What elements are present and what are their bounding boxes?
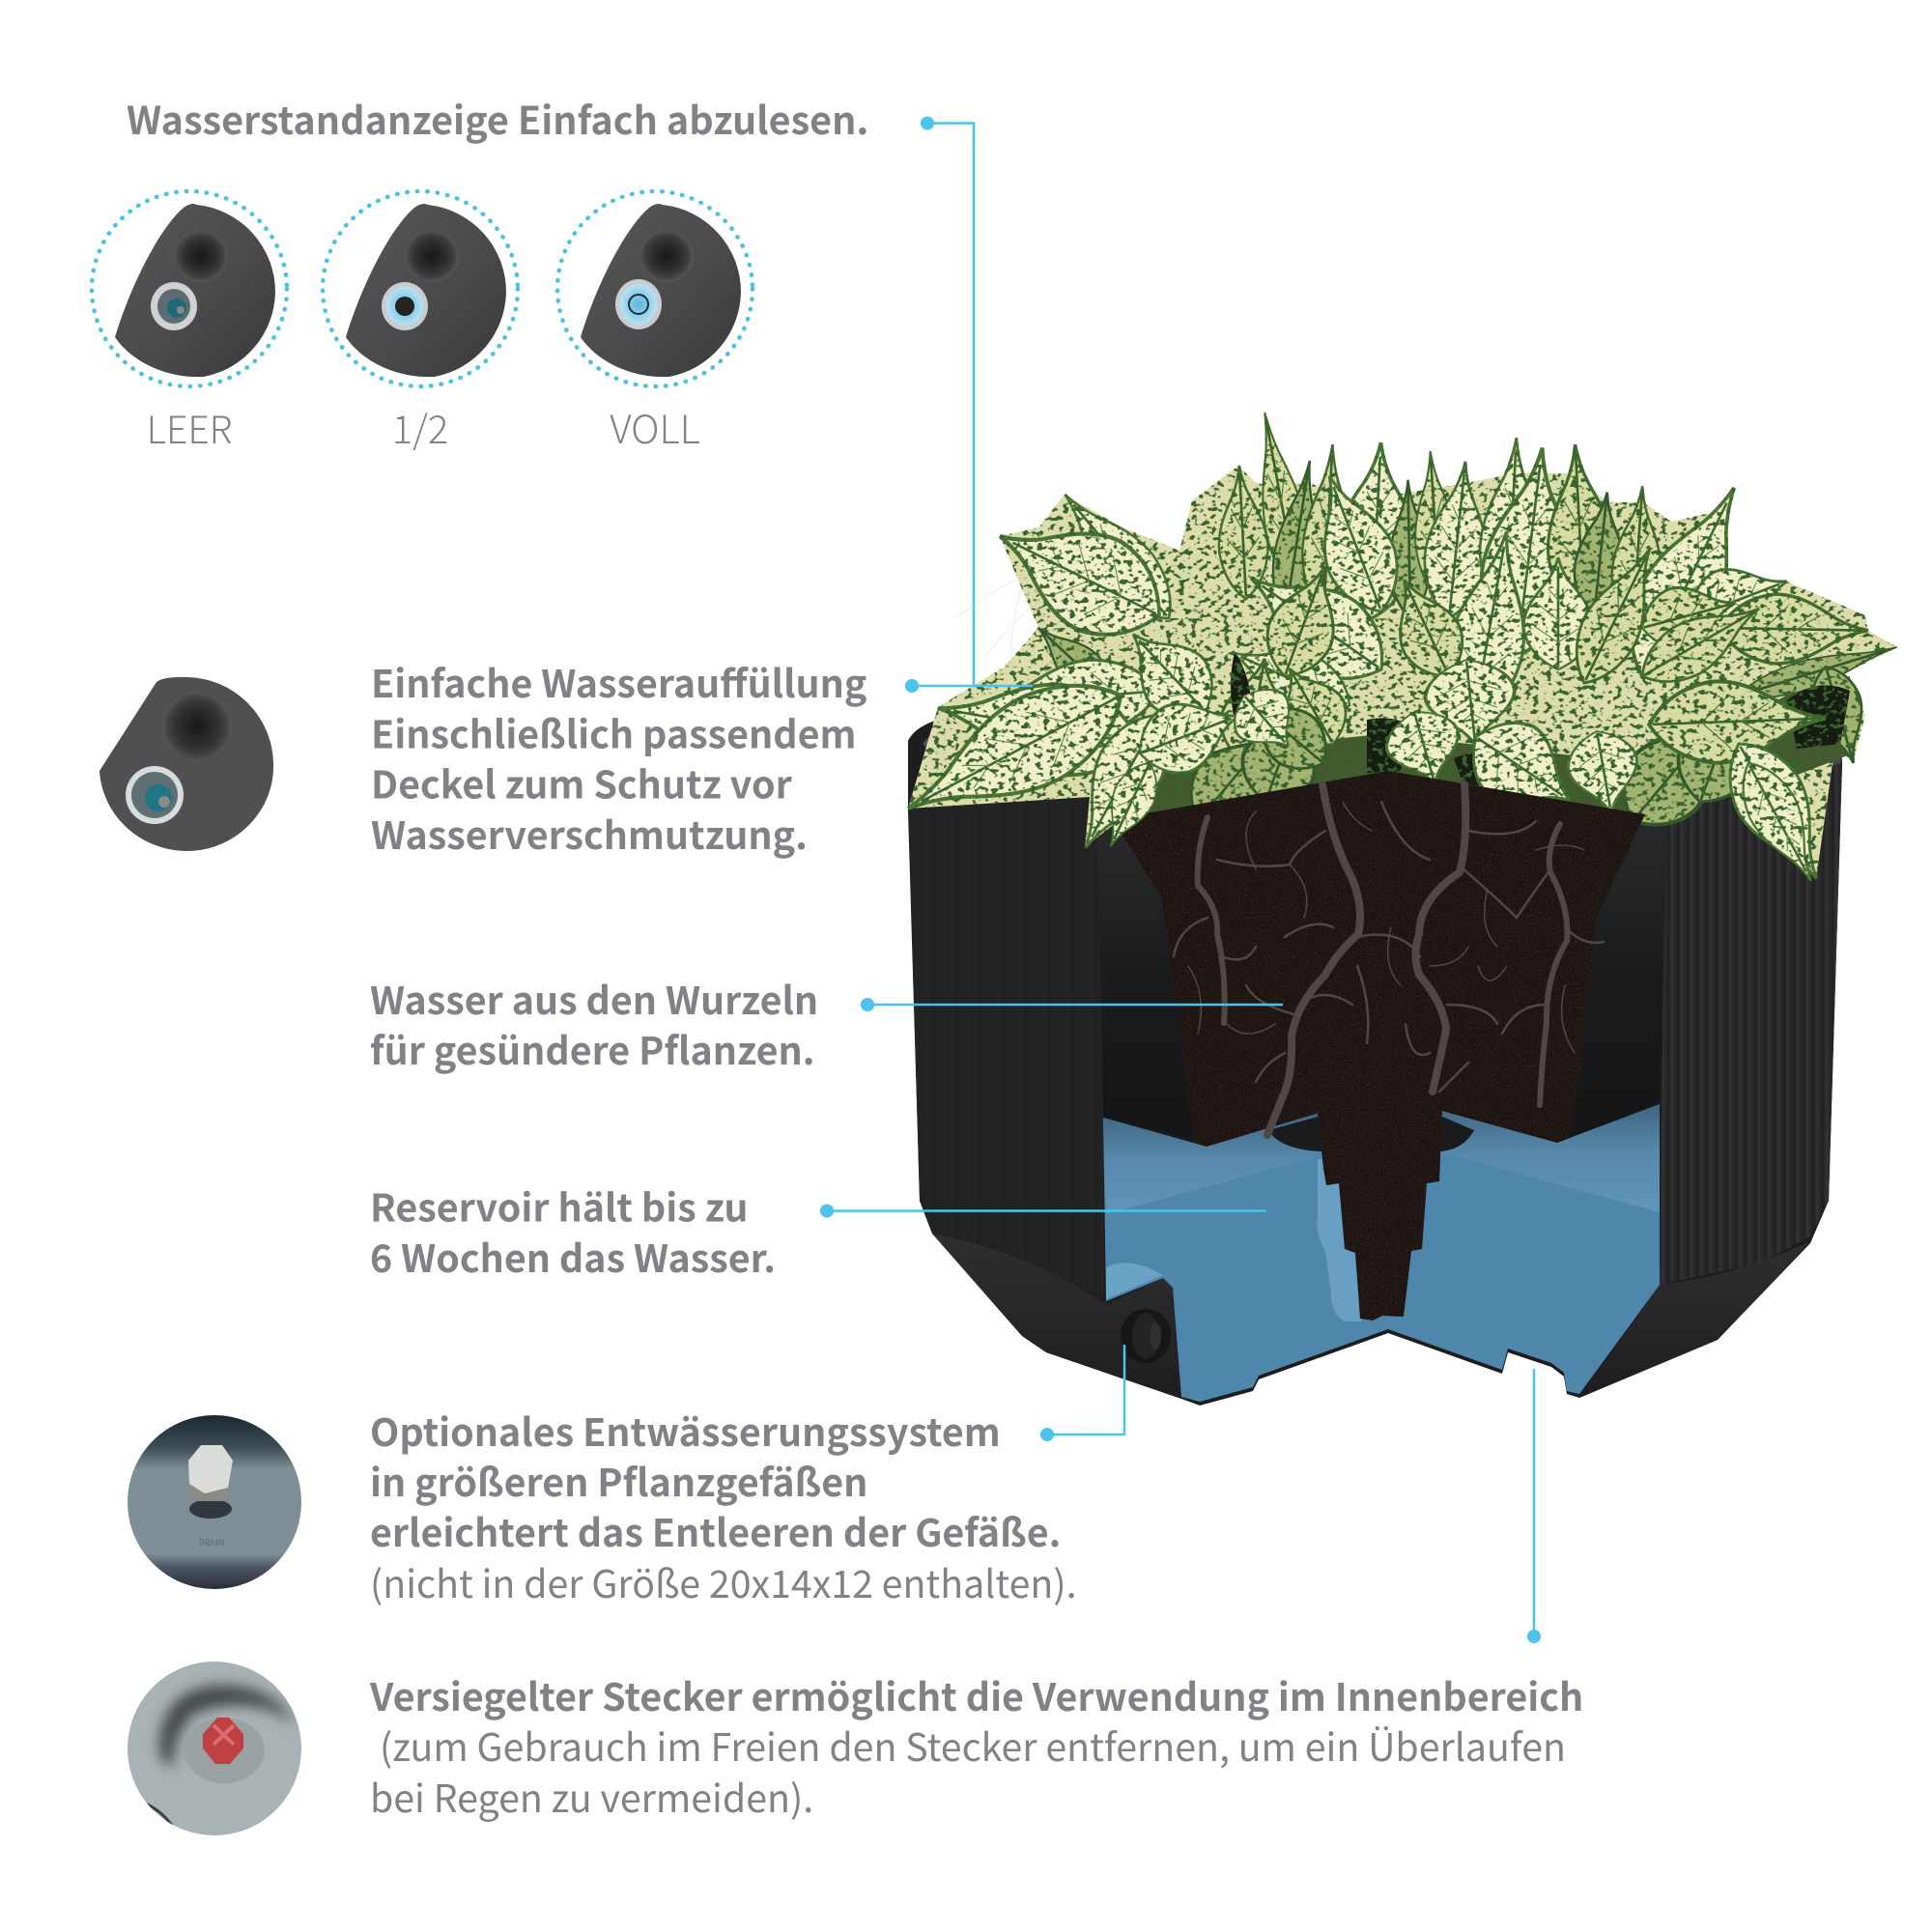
- right wall panel: [1660, 763, 1842, 1285]
- text: drainage system: Optionales Entwässerungssystem: [370, 1403, 1001, 1458]
- leaves overlapping the pot front: [1093, 752, 1833, 893]
- text: reservoir: [370, 1179, 776, 1284]
- faint roots behind plant: [956, 570, 1053, 696]
- fill hole: [174, 230, 228, 282]
- rim inner right: [1793, 742, 1841, 773]
- foliage lower shade: [1101, 676, 1853, 821]
- text: drainage system: in größeren Pflanzgefäßen: [370, 1453, 867, 1508]
- text: drainage system: [370, 1403, 1077, 1609]
- label: VOLL: VOLL: [610, 398, 700, 455]
- text: sealed plug: Versiegelter Stecker ermöglicht die Verwendung im Innenbereich: [369, 1667, 1583, 1722]
- drain plug: [1121, 1309, 1171, 1363]
- dark gaps between leaves: [1231, 652, 1850, 787]
- panel: level indicator HALF: [323, 191, 518, 386]
- dotted ring: [557, 191, 753, 386]
- soil: [1113, 771, 1645, 1321]
- planter cutaway illustration: [887, 409, 1901, 1406]
- callout line: drain: [1040, 1345, 1124, 1441]
- callout line: refill: [905, 679, 1033, 693]
- photo: sealed red plug: [126, 1657, 303, 1840]
- text: sealed plug: bei Regen zu vermeiden).: [370, 1769, 813, 1824]
- lower shaded leaves: [1172, 679, 1771, 847]
- roots: [1174, 784, 1604, 1135]
- planter corner: [581, 204, 741, 377]
- text: reservoir: Reservoir hält bis zu: [370, 1179, 748, 1233]
- label: LEER: LEER: [147, 401, 232, 455]
- empty sensor: [151, 282, 197, 330]
- full sensor: [615, 279, 662, 329]
- front leaves: [1057, 585, 1847, 895]
- reservoir central column: [1318, 1159, 1362, 1321]
- interior left wall: [1097, 816, 1194, 1140]
- text: drainage system: erleichtert das Entleeren der Gefäße.: [370, 1503, 1061, 1558]
- text: easy refill: [371, 654, 867, 861]
- left wall panel: [908, 792, 1103, 1299]
- text: easy refill: Einfache Wasserauffüllung: [371, 654, 867, 709]
- side leaves: [887, 476, 1869, 848]
- label: 1/2: 1/2: [392, 399, 448, 455]
- reservoir upper shelf right: [1442, 1104, 1660, 1212]
- text: easy refill: Wasserverschmutzung.: [371, 806, 808, 861]
- interior right wall: [1570, 809, 1665, 1138]
- left foot chamfer: [932, 1234, 1181, 1399]
- pot silhouette and rim: [908, 710, 1842, 1406]
- dotted ring: [323, 191, 518, 386]
- text: drainage system: (nicht in der Größe 20x14x12 enthalten).: [370, 1554, 1077, 1609]
- callout line: roots: [861, 998, 1283, 1011]
- center broad leaves: [1108, 464, 1675, 769]
- callout line: reservoir: [820, 1204, 1266, 1217]
- callout line: water level: [921, 116, 974, 686]
- panel: level indicator EMPTY: [92, 191, 287, 386]
- small leaf over interior: [1093, 754, 1168, 855]
- planter corner: [346, 204, 506, 377]
- reservoir cylinder behind soil: [1268, 1116, 1474, 1151]
- planter corner: [115, 204, 275, 377]
- rim inner left: [923, 717, 1024, 773]
- text: sealed plug: [369, 1667, 1583, 1824]
- heading: water level indicator: Wasserstandanzeige Einfach abzulesen.: [127, 91, 868, 146]
- icon: refill port photo: [99, 677, 273, 851]
- callout line: sealed plug: [1527, 1369, 1541, 1643]
- drooping right leaf: [1727, 752, 1833, 893]
- foliage mass: [908, 466, 1897, 879]
- text: easy refill: Deckel zum Schutz vor: [371, 755, 793, 810]
- back leaves: [1215, 409, 1901, 770]
- water reservoir: [1103, 1104, 1660, 1402]
- dotted ring: [92, 191, 287, 386]
- fill hole: [639, 230, 694, 282]
- photo: drain plug: [126, 1410, 303, 1594]
- text: water away from roots: [370, 971, 818, 1076]
- text: water away from roots: Wasser aus den Wurzeln: [370, 971, 818, 1026]
- text: easy refill: Einschließlich passendem: [371, 704, 857, 759]
- text: sealed plug: (zum Gebrauch im Freien den Stecker entfernen, um ein Überlaufen: [380, 1718, 1566, 1773]
- text: water away from roots: für gesündere Pflanzen.: [370, 1021, 815, 1076]
- right foot chamfer: [1579, 1241, 1810, 1398]
- photo: drain plug: DRAIN: [199, 1536, 224, 1548]
- reservoir lower-left highlight: [1106, 1264, 1163, 1299]
- plant foliage: [887, 409, 1901, 895]
- soil grain: [1113, 771, 1645, 1321]
- fill hole: [405, 230, 459, 282]
- reservoir upper shelf left: [1103, 1113, 1320, 1214]
- text: reservoir: 6 Wochen das Wasser.: [370, 1229, 776, 1284]
- half sensor: [382, 282, 428, 330]
- panel: level indicator FULL: [557, 191, 753, 386]
